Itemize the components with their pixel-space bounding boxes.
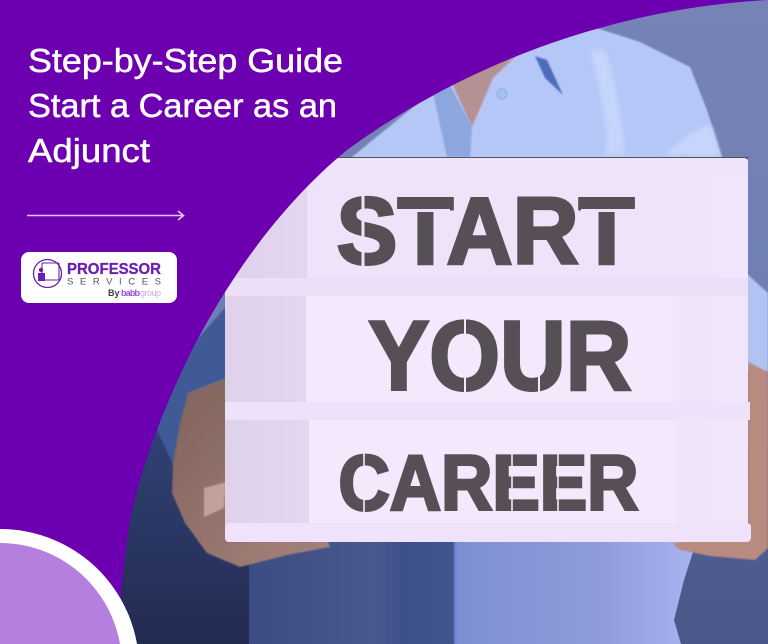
- board rail: top: [225, 158, 748, 177]
- neck skin: [452, 45, 533, 127]
- shirt lower placket seam: [454, 540, 457, 644]
- word: CAREER: CAREER: [338, 438, 638, 526]
- logo: [21, 252, 177, 303]
- left fingernail: [204, 482, 226, 517]
- right sleeve: [745, 272, 768, 372]
- left sleeve: [155, 300, 232, 465]
- paper strip: row 1: [307, 177, 673, 278]
- word: START: START: [336, 178, 634, 284]
- logo attribution: babb: [121, 288, 140, 298]
- arrow: [27, 211, 184, 220]
- light board: [224, 157, 751, 542]
- logo wordmark: PROFESSOR: [67, 261, 161, 278]
- corner circle: lilac fill: [0, 543, 120, 644]
- collar shadow: [535, 56, 563, 95]
- right hand: [672, 362, 768, 560]
- title: Adjunct: [28, 132, 150, 169]
- logo attribution: [108, 288, 161, 298]
- board rail: third: [225, 402, 750, 420]
- logo attribution: By: [108, 288, 120, 298]
- paper strip: row 2: [306, 296, 673, 402]
- paper strip: row 3: [309, 420, 676, 523]
- logo icon: [34, 260, 62, 288]
- board rail: second: [225, 278, 748, 296]
- word: YOUR: YOUR: [368, 300, 632, 410]
- title: Step-by-Step Guide: [28, 42, 343, 79]
- logo attribution: group: [140, 288, 161, 298]
- collar button: [497, 89, 507, 99]
- corner circle: white ring: [0, 529, 137, 644]
- shirt lower right: [455, 530, 700, 644]
- board rail: bottom: [225, 523, 751, 542]
- left hand: [172, 378, 330, 567]
- shirt lower left: [249, 530, 455, 644]
- logo subline: SERVICES: [67, 276, 161, 288]
- shirt upper: [330, 25, 722, 200]
- title: [28, 42, 343, 169]
- title: Start a Career as an: [28, 87, 337, 124]
- shirt placket: [433, 85, 472, 157]
